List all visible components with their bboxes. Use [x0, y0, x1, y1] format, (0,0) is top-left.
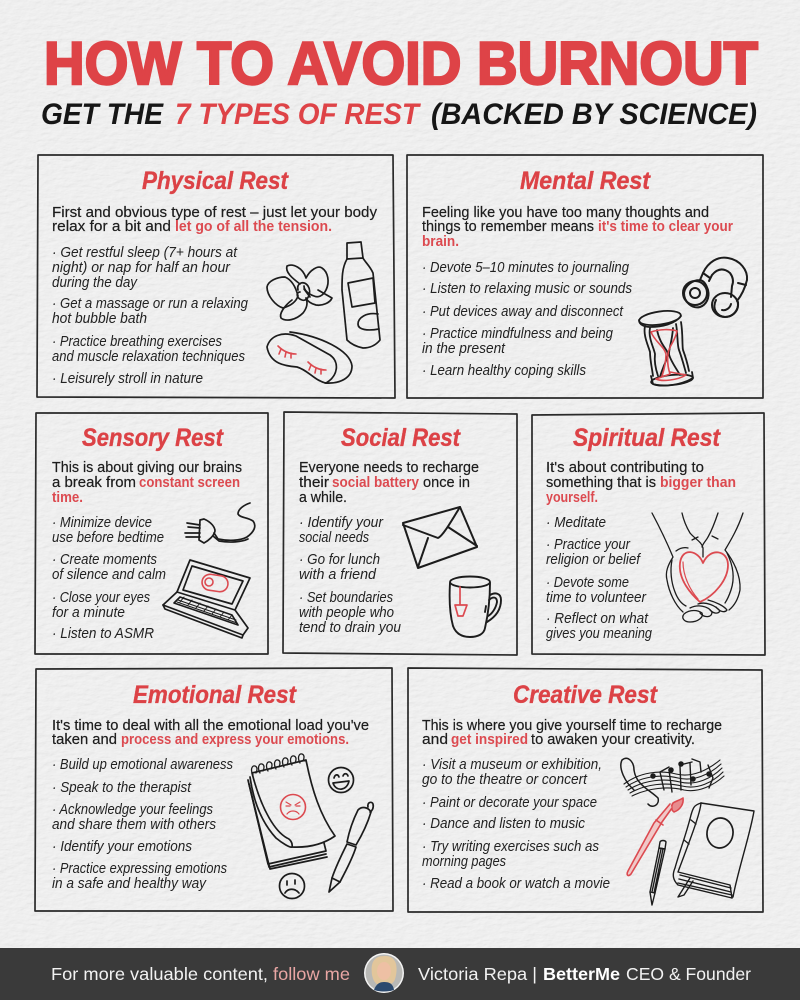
panel: physical rest: [37, 155, 395, 398]
icon: sad face: [280, 874, 304, 898]
list: spiritual rest tips: [546, 515, 652, 642]
panel: mental rest: [407, 155, 763, 398]
list: creative rest tips: · Read a book or watch a movie: [422, 876, 610, 892]
intro: emotional rest: [52, 718, 369, 748]
list: creative rest tips: · Try writing exercises such as: [422, 839, 599, 855]
intro: mental rest: brain.: [422, 234, 459, 250]
intro: social rest: Everyone needs to recharge: [299, 460, 479, 476]
title: HOW TO AVOID BURNOUT: [44, 30, 758, 97]
icon: pen: [329, 802, 373, 892]
footer call to action: [51, 964, 350, 984]
list: social rest tips: tend to drain you: [299, 620, 401, 636]
icon: book with circle: [673, 803, 754, 898]
list: physical rest tips: and muscle relaxation techniques: [52, 349, 245, 365]
footer call to action: For more valuable content,: [51, 964, 268, 984]
intro: sensory rest: This is about giving our brains: [52, 460, 242, 476]
list: mental rest tips: · Practice mindfulness and being: [422, 326, 613, 342]
subtitle: GET THE: [41, 98, 164, 131]
panel: sensory rest: [35, 413, 268, 654]
panel: spiritual rest: [532, 413, 765, 655]
icon: plug and cable: [185, 503, 255, 543]
list: physical rest tips: night) or nap for half an hour: [52, 260, 231, 276]
icon: notepad with angry face: [248, 754, 335, 869]
panel: social rest: [283, 412, 517, 655]
list: mental rest tips: [422, 260, 632, 379]
intro: physical rest: relax for a bit and: [52, 219, 171, 235]
list: spiritual rest tips: gives you meaning: [546, 626, 652, 642]
panel: creative rest: [408, 668, 763, 912]
intro: spiritual rest: [546, 460, 736, 506]
intro: social rest: [299, 460, 479, 506]
list: physical rest tips: [52, 245, 248, 387]
intro: mental rest: things to remember means: [422, 219, 594, 235]
list: emotional rest tips: and share them with others: [52, 817, 216, 833]
list: emotional rest tips: · Acknowledge your feelings: [52, 802, 213, 818]
icon: hourglass: [638, 309, 693, 387]
intro: spiritual rest: bigger than: [660, 475, 736, 491]
list: creative rest tips: [422, 757, 610, 892]
list: emotional rest tips: · Build up emotional awareness: [52, 757, 233, 773]
icon: happy face: [328, 768, 354, 792]
icon: music staff and notes: [621, 758, 724, 806]
intro: creative rest: to awaken your creativity.: [531, 732, 695, 748]
icon: headphones: [683, 258, 747, 317]
icon: laptop: [163, 560, 250, 638]
intro: social rest: a while.: [299, 490, 347, 506]
list: emotional rest tips: · Practice expressing emotions: [52, 861, 227, 877]
icon: sleep mask: [267, 332, 352, 383]
intro: creative rest: and: [422, 732, 448, 748]
subtitle: 7 TYPES OF REST: [175, 98, 421, 131]
list: spiritual rest tips: · Reflect on what: [546, 611, 649, 627]
intro: emotional rest: taken and: [52, 732, 117, 748]
footer author credit: [418, 964, 751, 984]
list: emotional rest tips: in a safe and healthy way: [52, 876, 207, 892]
intro: creative rest: get inspired: [451, 732, 528, 748]
list: sensory rest tips: · Minimize device: [52, 515, 152, 531]
subtitle: (BACKED BY SCIENCE): [431, 98, 757, 131]
intro: spiritual rest: yourself.: [546, 490, 598, 506]
intro: social rest: social battery: [332, 475, 419, 491]
heading: spiritual rest: Spiritual Rest: [573, 424, 722, 452]
list: spiritual rest tips: · Meditate: [546, 515, 606, 531]
intro: social rest: once in: [423, 475, 470, 491]
icon: lotion bottle: [342, 242, 380, 348]
intro: sensory rest: constant screen: [139, 475, 240, 491]
icon: orchid flower: [267, 265, 332, 320]
panel: emotional rest: [35, 668, 393, 911]
avatar portrait: [364, 953, 404, 993]
list: sensory rest tips: for a minute: [52, 605, 125, 621]
list: mental rest tips: · Devote 5–10 minutes to journaling: [422, 260, 629, 276]
heading: social rest: Social Rest: [341, 424, 461, 452]
list: creative rest tips: · Dance and listen to music: [422, 816, 586, 832]
list: sensory rest tips: use before bedtime: [52, 530, 164, 546]
list: social rest tips: · Identify your: [299, 515, 384, 531]
icon: envelope: [403, 507, 477, 568]
intro: mental rest: it's time to clear your: [598, 219, 733, 235]
list: spiritual rest tips: · Practice your: [546, 537, 631, 553]
heading: emotional rest: Emotional Rest: [133, 681, 297, 709]
intro: social rest: their: [299, 475, 329, 491]
list: emotional rest tips: [52, 757, 233, 892]
list: sensory rest tips: · Listen to ASMR: [52, 626, 154, 642]
list: physical rest tips: hot bubble bath: [52, 311, 147, 327]
list: physical rest tips: during the day: [52, 275, 138, 291]
list: physical rest tips: · Practice breathing exercises: [52, 334, 222, 350]
intro: physical rest: [52, 205, 378, 235]
list: social rest tips: · Set boundaries: [299, 590, 393, 606]
intro: spiritual rest: something that is: [546, 475, 656, 491]
list: sensory rest tips: [52, 515, 166, 642]
list: creative rest tips: · Paint or decorate your space: [422, 795, 597, 811]
intro: creative rest: This is where you give yourself time to recharge: [422, 718, 722, 734]
list: mental rest tips: · Put devices away and disconnect: [422, 304, 624, 320]
intro: sensory rest: a break from: [52, 475, 136, 491]
list: spiritual rest tips: time to volunteer: [546, 590, 647, 606]
footer author credit: BetterMe: [543, 964, 620, 984]
footer bar: [0, 948, 800, 1000]
list: creative rest tips: morning pages: [422, 854, 506, 870]
list: social rest tips: · Go for lunch: [299, 552, 380, 568]
list: creative rest tips: go to the theatre or concert: [422, 772, 588, 788]
list: spiritual rest tips: · Devote some: [546, 575, 629, 591]
intro: sensory rest: [52, 460, 242, 506]
list: creative rest tips: · Visit a museum or exhibition,: [422, 757, 602, 773]
list: social rest tips: [299, 515, 401, 636]
footer author credit: Victoria Repa |: [418, 964, 537, 984]
intro: spiritual rest: It's about contributing to: [546, 460, 704, 476]
footer call to action: follow me: [273, 964, 350, 984]
list: mental rest tips: in the present: [422, 341, 506, 357]
intro: physical rest: let go of all the tension.: [175, 219, 332, 235]
list: social rest tips: with a friend: [299, 567, 377, 583]
heading: creative rest: Creative Rest: [513, 681, 658, 709]
list: mental rest tips: · Listen to relaxing music or sounds: [422, 281, 632, 297]
heading: physical rest: Physical Rest: [142, 167, 289, 195]
subtitle: [41, 98, 757, 131]
list: emotional rest tips: · Identify your emotions: [52, 839, 192, 855]
list: spiritual rest tips: religion or belief: [546, 552, 642, 568]
list: emotional rest tips: · Speak to the therapist: [52, 780, 192, 796]
heading: sensory rest: Sensory Rest: [82, 424, 224, 452]
list: sensory rest tips: of silence and calm: [52, 567, 166, 583]
intro: creative rest: [422, 718, 722, 748]
list: physical rest tips: · Get a massage or run a relaxing: [52, 296, 248, 312]
list: mental rest tips: · Learn healthy coping skills: [422, 363, 586, 379]
intro: emotional rest: process and express your emotions.: [121, 732, 349, 748]
list: sensory rest tips: · Close your eyes: [52, 590, 150, 606]
list: physical rest tips: · Get restful sleep (7+ hours at: [52, 245, 238, 261]
intro: sensory rest: time.: [52, 490, 83, 506]
intro: mental rest: [422, 205, 733, 250]
list: sensory rest tips: · Create moments: [52, 552, 157, 568]
icon: pencil: [650, 840, 666, 905]
icon: hands holding heart: [652, 513, 743, 622]
icon: paint brush: [627, 798, 683, 875]
list: social rest tips: social needs: [299, 530, 369, 546]
intro: emotional rest: It's time to deal with all the emotional load you've: [52, 718, 369, 734]
intro: physical rest: First and obvious type of rest – just let your body: [52, 205, 378, 221]
list: physical rest tips: · Leisurely stroll in nature: [52, 371, 203, 387]
list: social rest tips: with people who: [299, 605, 394, 621]
intro: mental rest: Feeling like you have too many thoughts and: [422, 205, 709, 221]
heading: mental rest: Mental Rest: [520, 167, 652, 195]
icon: mug with tea bag: [450, 576, 501, 637]
footer author credit: CEO & Founder: [626, 964, 751, 984]
